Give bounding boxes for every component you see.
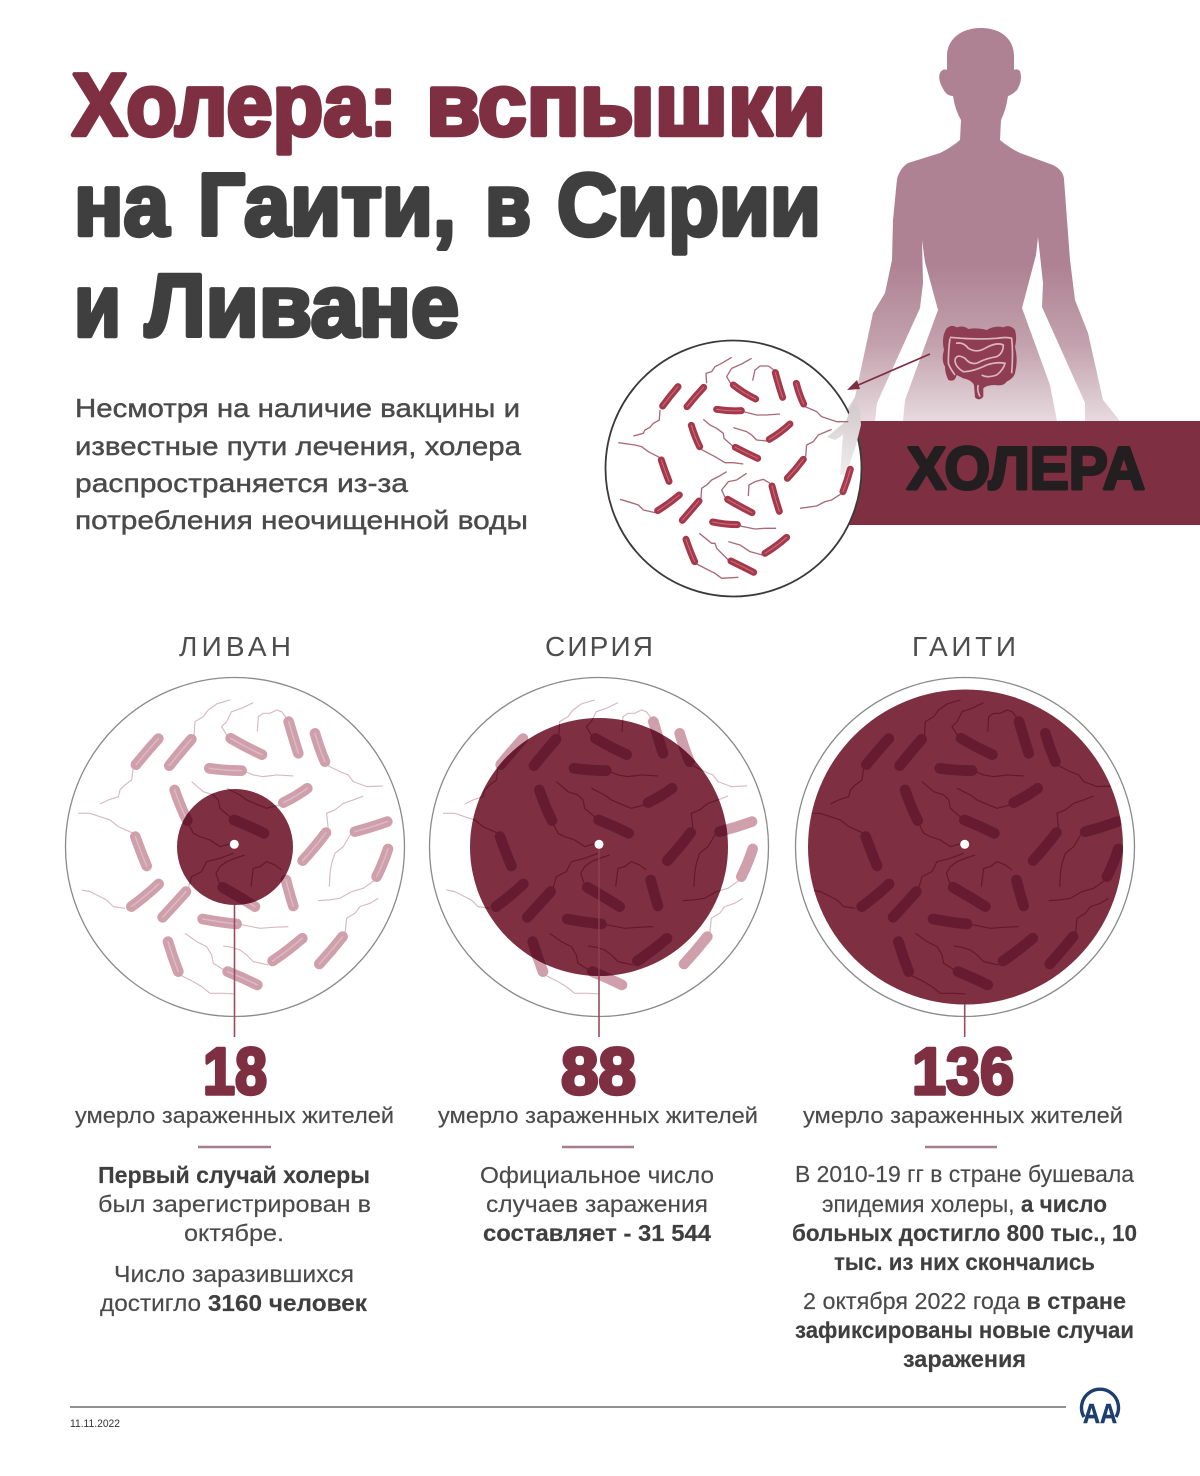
details: Lebanon: достигло 3160 человек xyxy=(100,1290,368,1316)
date: 11.11.2022 xyxy=(70,1418,120,1430)
arrow from intestine to bacteria xyxy=(847,354,930,390)
details: Lebanon: Число заразившихся xyxy=(114,1261,354,1287)
magnified bacteria circle xyxy=(606,340,862,596)
logo: Anadolu Agency: AA xyxy=(1083,1398,1117,1429)
details: Haiti: зафиксированы новые случаи xyxy=(795,1317,1134,1343)
death count: Syria: 88 xyxy=(561,1034,636,1108)
panel: Syria xyxy=(430,631,768,1246)
details: Haiti: В 2010-19 гг в стране бушевала xyxy=(795,1161,1134,1187)
details: Syria xyxy=(480,1162,714,1246)
banner: cholera: ХОЛЕРА xyxy=(907,435,1145,502)
title: Гаити, xyxy=(198,155,456,254)
panel: Haiti xyxy=(792,631,1137,1372)
intro text: Несмотря на наличие вакцины и xyxy=(75,393,520,423)
details: Syria: составляет - 31 544 xyxy=(483,1220,711,1246)
details: Haiti: тыс. из них скончались xyxy=(834,1249,1095,1275)
panel: Lebanon xyxy=(66,631,404,1316)
banner: cholera xyxy=(840,421,1200,525)
caption: Lebanon: умерло зараженных жителей xyxy=(75,1103,394,1128)
details: Lebanon: Первый случай холеры xyxy=(98,1162,370,1188)
title: Ливане xyxy=(145,256,459,355)
logo: Anadolu Agency xyxy=(1082,1389,1118,1429)
details: Lebanon: октябре. xyxy=(184,1220,284,1246)
details: Lebanon xyxy=(98,1162,371,1316)
intro text: известные пути лечения, холера xyxy=(75,431,522,461)
proportional circle: Haiti xyxy=(796,678,1134,1037)
title: вспышки xyxy=(426,55,826,154)
details: Haiti: больных достигло 800 тыс., 10 xyxy=(792,1220,1137,1246)
details: Syria: Официальное число xyxy=(480,1162,714,1188)
title xyxy=(72,55,826,355)
title: на xyxy=(74,155,170,254)
human body silhouette xyxy=(840,28,1120,421)
details: Haiti xyxy=(792,1161,1137,1372)
title: в xyxy=(485,155,531,254)
caption: Syria: умерло зараженных жителей xyxy=(438,1103,758,1128)
death count: Lebanon: 18 xyxy=(203,1034,267,1108)
title: Холера: xyxy=(72,55,397,154)
proportional circle: Lebanon xyxy=(66,678,404,1037)
country label: Haiti: ГАИТИ xyxy=(912,631,1016,662)
details: Syria: случаев заражения xyxy=(486,1191,708,1217)
caption: Haiti: умерло зараженных жителей xyxy=(803,1103,1123,1128)
details: Haiti: 2 октября 2022 года в стране xyxy=(803,1288,1126,1314)
death count: Haiti: 136 xyxy=(912,1034,1014,1108)
intestine icon xyxy=(943,326,1017,399)
intro text xyxy=(75,393,528,535)
title: и xyxy=(74,256,121,355)
country label: Lebanon: ЛИВАН xyxy=(179,631,291,662)
title: Сирии xyxy=(557,155,821,254)
details: Haiti: заражения xyxy=(903,1346,1026,1372)
intro text: потребления неочищенной воды xyxy=(75,505,528,535)
proportional circle: Syria xyxy=(430,678,768,1037)
intro text: распространяется из-за xyxy=(75,468,409,498)
details: Lebanon: был зарегистрирован в xyxy=(98,1191,371,1217)
country label: Syria: СИРИЯ xyxy=(545,631,653,662)
details: Haiti: эпидемия холеры, а число xyxy=(822,1191,1107,1217)
